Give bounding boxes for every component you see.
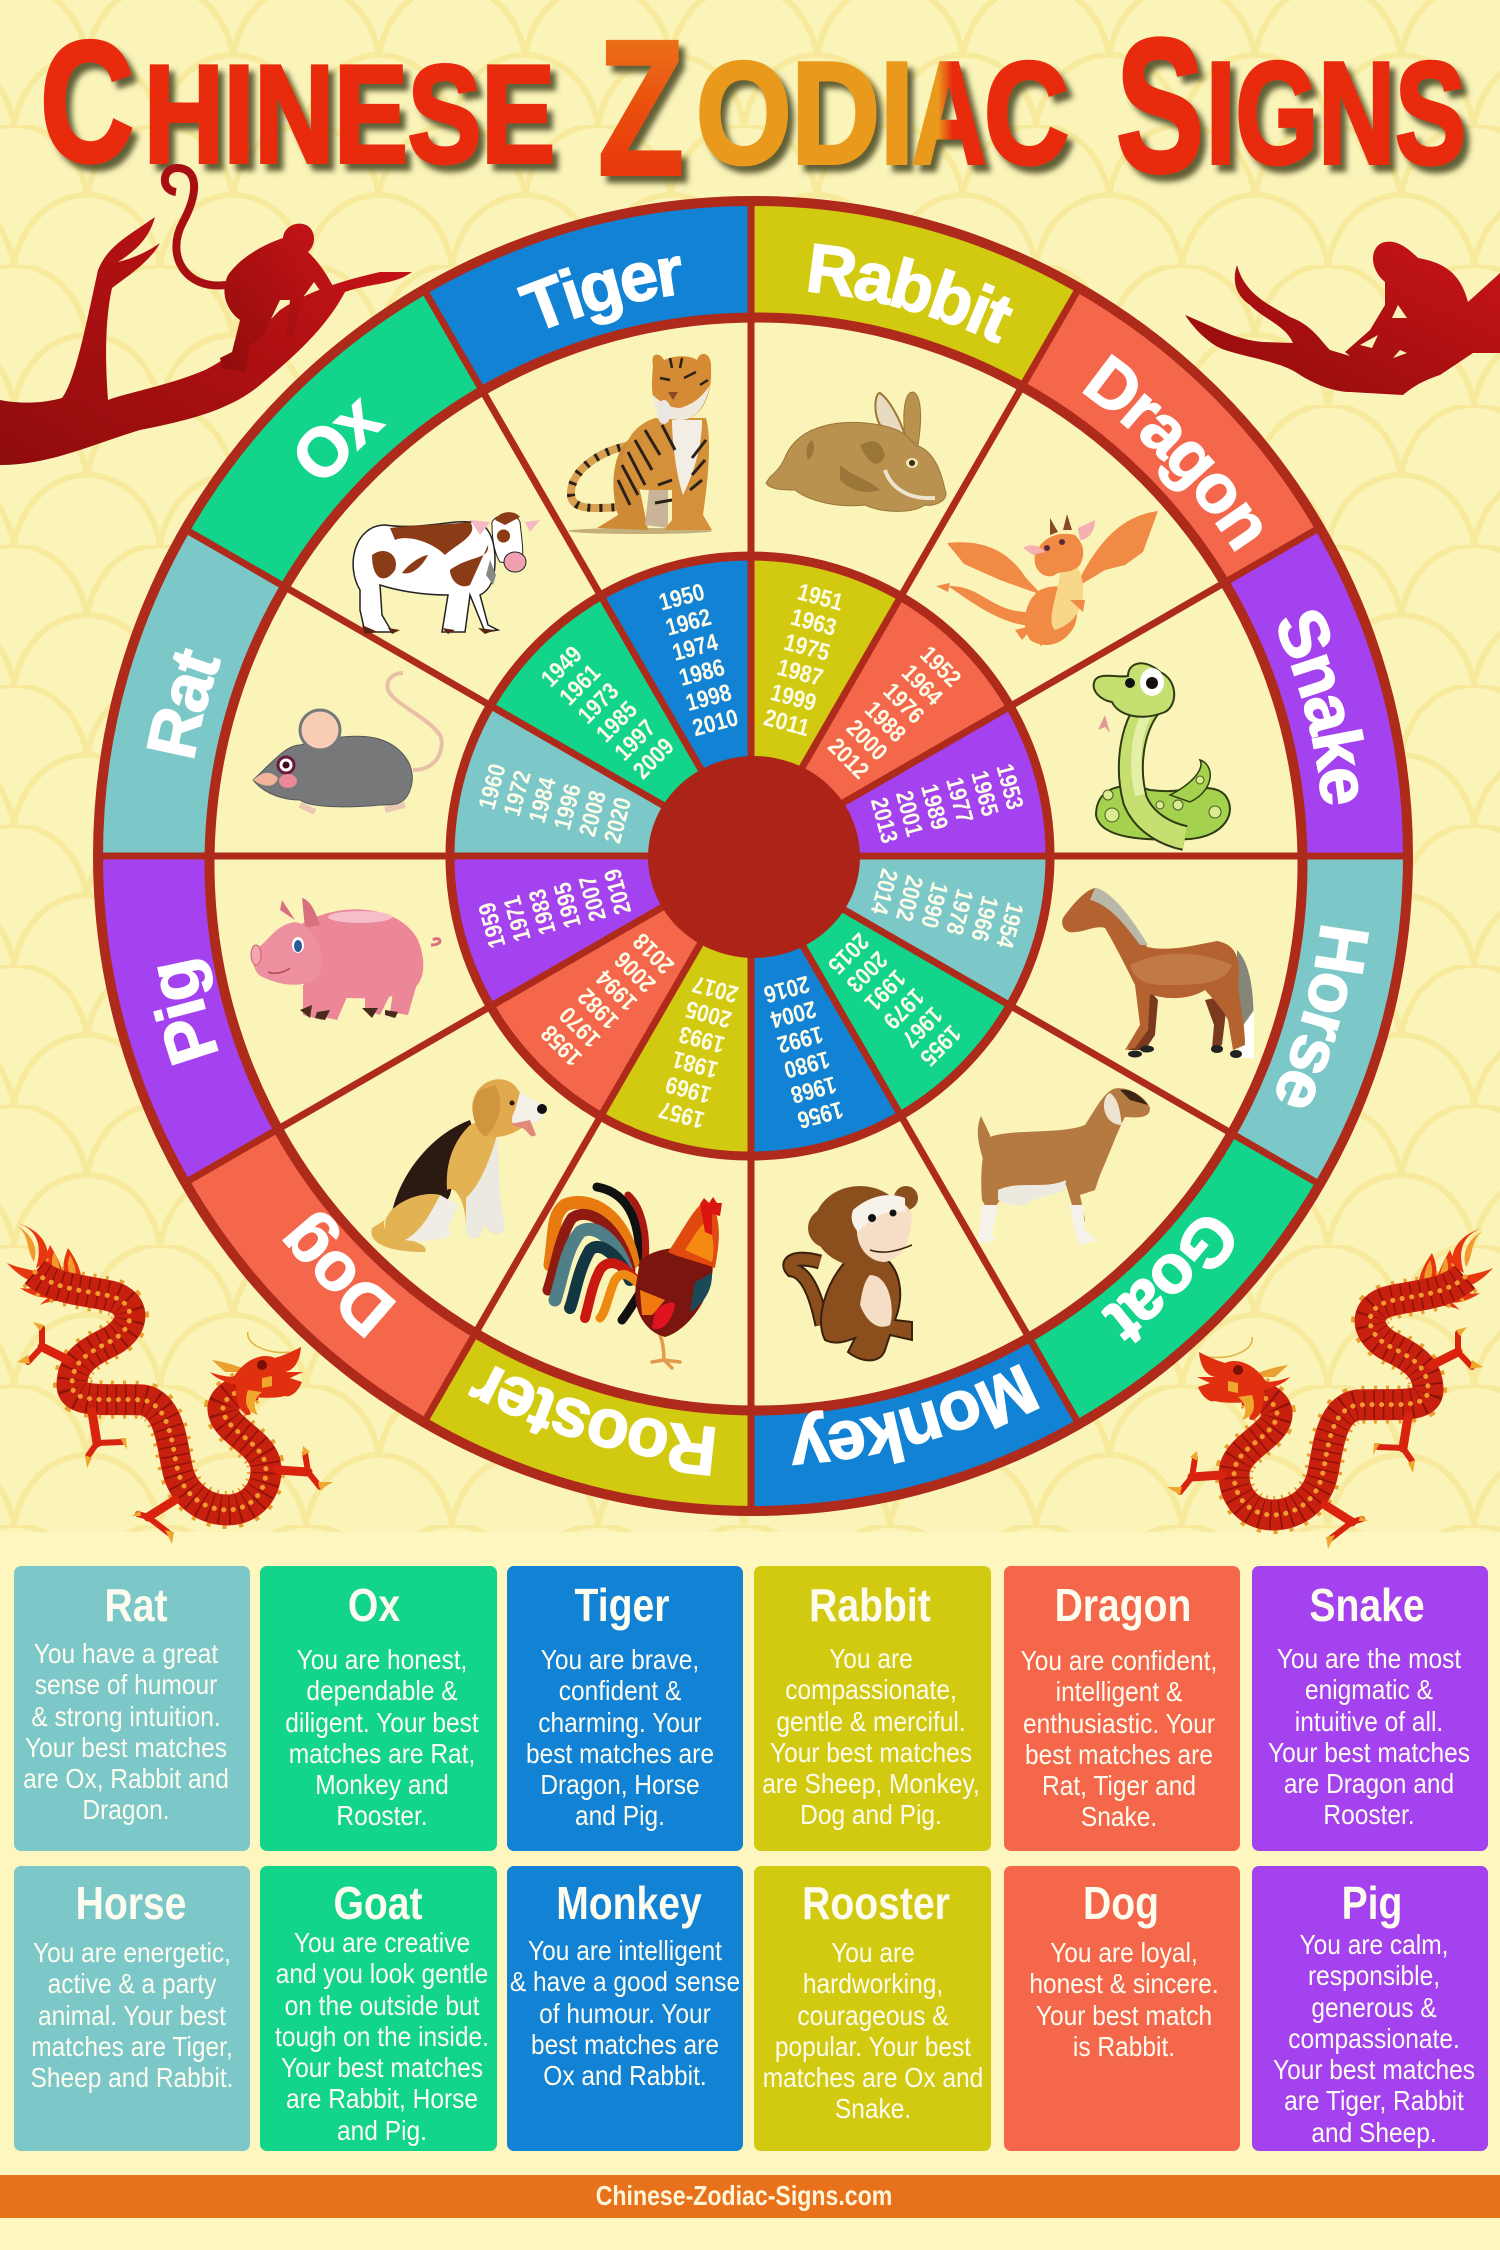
birth years on inner band: 1984 [524,774,562,826]
birth years on inner band: 2013 [865,795,903,846]
birth years on inner band: 1996 [549,781,587,833]
card: Pig: and Sheep. [1311,2117,1437,2148]
birth years on inner band: 1952 [914,641,966,693]
birth years on inner band: 2003 [841,946,892,997]
card: Horse: You are energetic, [33,1937,231,1968]
icon: baby dragon [936,511,1158,646]
icon: rat [253,673,442,812]
birth years on inner band: 1962 [663,604,714,642]
card: Dragon [1004,1566,1240,1851]
monkey silhouette on branch, top left [0,168,412,465]
card: Pig: are Tiger, Rabbit [1284,2085,1464,2116]
birth years on inner band: 1973 [573,678,624,729]
card: Pig: compassionate. [1288,2023,1460,2054]
card: Dog: Your best match [1036,2000,1212,2031]
birth years on inner band: 2018 [628,927,680,979]
birth years on inner band: 2007 [574,873,612,924]
card: Rooster: courageous & [797,2000,949,2031]
card: Dragon: best matches are [1025,1739,1213,1770]
card: Snake: Your best matches [1268,1737,1470,1768]
birth years on inner band: 2012 [822,733,874,785]
birth years on inner band: 1967 [896,1001,948,1053]
birth years on inner band: 1968 [788,1070,839,1108]
birth years on inner band: 1998 [683,679,734,717]
card: Snake: Rooster. [1323,1799,1415,1830]
card: Snake: intuitive of all. [1295,1706,1443,1737]
birth years on inner band: 1990 [915,879,953,931]
birth years on inner band: 2006 [610,946,661,997]
sign names on outer band: Ox [296,397,387,478]
birth years on inner band: 2014 [865,866,903,918]
birth years on inner band: 1965 [965,768,1003,819]
card: Goat: You are creative [294,1927,470,1958]
sign names on outer band: Pig [153,959,219,1066]
birth years on inner band: 1954 [990,900,1028,951]
birth years on inner band: 1956 [795,1095,846,1133]
dragon, bottom right [1167,1228,1493,1549]
card: Rooster: You are [831,1937,915,1968]
card: Rabbit: Dog and Pig. [800,1799,942,1830]
card: Goat: and Pig. [337,2115,427,2146]
birth years on inner band: 2019 [599,866,637,917]
card: Dog [1004,1866,1240,2151]
birth years on inner band: 2011 [761,704,812,742]
card: Dog: You are loyal, [1050,1937,1198,1968]
sign names on outer band: Dog [282,1212,396,1338]
card: Goat: are Rabbit, Horse [286,2083,478,2114]
birth years on inner band: 2020 [599,795,637,846]
card: Monkey: Ox and Rabbit. [543,2060,707,2091]
title: HINESE [144,37,555,192]
card: Rat: You have a great [34,1638,218,1669]
card: Pig: You are calm, [1300,1929,1448,1960]
sign names on outer band [146,243,1370,1476]
birth years on inner band: 1983 [524,886,562,937]
card: Monkey: best matches are [531,2029,719,2060]
birth years on inner band: 1981 [670,1045,721,1083]
card: Tiger: charming. Your [538,1707,702,1738]
card: Rabbit: You are [829,1643,913,1674]
card: Ox: Rooster. [336,1800,428,1831]
birth years on inner band: 1999 [768,679,819,717]
sign names on outer band: Goat [1101,1217,1234,1344]
card: Pig: generous & [1311,1992,1437,2023]
birth years on inner band: 1966 [965,893,1003,944]
title: A [912,32,986,194]
card: Tiger: You are brave, [541,1644,699,1675]
card: Snake: enigmatic & [1305,1674,1433,1705]
sign names on outer band: Horse [1276,925,1370,1108]
card: Pig: Pig [1342,1877,1402,1929]
card: Dog: Dog [1083,1877,1159,1929]
card: Dragon: You are confident, [1021,1645,1217,1676]
card: Snake: Snake [1309,1579,1425,1631]
centre hub [648,756,860,958]
card: Tiger: confident & [559,1675,681,1706]
card: Rooster: Rooster [802,1877,950,1929]
card: Pig [1252,1866,1488,2151]
card: Ox: matches are Rat, [289,1738,475,1769]
birth years on inner band: 1986 [676,654,728,692]
card: Rooster: Snake. [835,2093,911,2124]
title: S [1116,0,1204,212]
card: Dragon: Rat, Tiger and [1042,1770,1196,1801]
footer bar [0,2175,1500,2218]
birth years on inner band: 1992 [774,1020,826,1058]
birth years on inner band: 1950 [656,579,707,617]
card: Horse: Sheep and Rabbit. [31,2062,233,2093]
birth years on inner band: 1976 [878,678,929,729]
card: Goat [260,1866,497,2151]
card: Goat: on the outside but [285,1990,479,2021]
birth years on inner band: 1958 [536,1019,588,1071]
birth years on inner band: 1960 [474,761,512,812]
card: Dragon: Dragon [1055,1579,1191,1631]
birth years on inner band: 1964 [896,659,948,711]
birth years on inner band: 1961 [554,659,606,711]
card: Snake: You are the most [1277,1643,1461,1674]
icon: horse [1062,888,1254,1058]
birth years on inner band: 1970 [554,1001,606,1053]
birth years on inner band: 1982 [573,983,624,1034]
birth years on inner band: 1980 [781,1045,832,1083]
card: Rat: Dragon. [82,1794,170,1825]
card: Rat: sense of humour [35,1669,217,1700]
birth years on inner band: 1993 [676,1020,728,1058]
card: Dragon: intelligent & [1056,1676,1182,1707]
birth years on inner band: 1977 [940,775,978,826]
birth years on inner band: 2016 [761,970,812,1008]
icon: pig [251,898,440,1020]
card: Rabbit: Rabbit [809,1579,931,1631]
title: C [984,32,1069,194]
birth years on inner band: 1953 [990,761,1028,812]
icon: monkey [790,1186,918,1360]
sign names on outer band: Rabbit [808,243,1014,344]
card: Dog: honest & sincere. [1029,1968,1219,1999]
card: Rabbit: Your best matches [770,1737,972,1768]
icon: tiger [568,354,712,534]
card: Tiger: Tiger [575,1579,669,1631]
birth years on inner band: 2017 [690,970,741,1008]
birth years on inner band: 1995 [549,879,587,931]
card: Goat: Your best matches [281,2052,483,2083]
card: Rooster [754,1866,991,2151]
card: Ox: diligent. Your best [285,1707,479,1738]
title: ODI [696,32,914,194]
birth years on inner band: 2001 [890,788,928,839]
sign names on outer band: Tiger [516,256,682,328]
birth years on inner band: 1979 [878,983,929,1034]
birth years on inner band: 2002 [890,873,928,924]
card: Goat: and you look gentle [276,1958,488,1989]
birth years on inner band: 1969 [663,1070,714,1108]
card: Horse: active & a party [48,1968,216,1999]
card: Tiger: Dragon, Horse [540,1769,700,1800]
card: Dog: is Rabbit. [1073,2031,1175,2062]
card: Rooster: matches are Ox and [763,2062,983,2093]
birth years on inner band: 1975 [781,629,832,667]
icon: ox [353,512,540,634]
zodiac wheel [93,196,1413,1516]
sign names on outer band: Dragon [1082,354,1262,552]
birth years on inner band: 1955 [914,1019,966,1071]
birth years on inner band: 1991 [859,964,911,1016]
birth years on inner band: 1963 [788,604,839,642]
birth years on inner band: 2010 [690,704,741,742]
card: Horse [14,1866,250,2151]
sign names on outer band: Rooster [468,1366,716,1476]
birth years on inner band: 2009 [628,733,680,785]
card: Rat: Rat [104,1579,168,1631]
birth years on inner band: 1951 [795,579,846,617]
card: Tiger: and Pig. [575,1800,665,1831]
card: Monkey: of humour. Your [539,1998,711,2029]
icon: snake [1094,663,1230,840]
card: Rat: Your best matches [25,1732,227,1763]
birth years on inner band: 2005 [683,995,734,1033]
card: Monkey: Monkey [556,1877,702,1929]
birth years on inner band: 1959 [474,900,512,951]
monkey silhouette, top right [1185,242,1500,395]
birth years on inner band: 1974 [670,629,721,667]
background scale pattern [0,0,1500,1532]
card: Ox: You are honest, [297,1644,467,1675]
title [40,0,1466,215]
icon: rabbit [766,392,946,511]
card: Pig: Your best matches [1273,2054,1475,2085]
card: Horse: Horse [76,1877,186,1929]
card: Monkey: You are intelligent [528,1935,722,1966]
birth years on inner band: 1988 [859,696,911,748]
card: Tiger: best matches are [526,1738,714,1769]
card: Rabbit [754,1566,991,1851]
card: Goat: tough on the inside. [275,2021,489,2052]
card: Horse: matches are Tiger, [31,2031,233,2062]
card: Rooster: popular. Your best [775,2031,971,2062]
birth years on inner band: 2000 [841,715,892,766]
card: Rooster: hardworking, [803,1968,943,1999]
birth years on inner band: 1949 [536,641,588,693]
card: Pig: responsible, [1308,1960,1440,1991]
birth years on inner band: 1971 [499,893,537,944]
card: Ox: Ox [348,1579,400,1631]
card: Rat: & strong intuition. [31,1701,221,1732]
card: Snake: are Dragon and [1284,1768,1454,1799]
icon: goat [978,1088,1150,1246]
card: Snake [1252,1566,1488,1851]
card: Monkey [507,1866,743,2151]
outer band: sign segments [0,47,1500,1665]
card: Goat: Goat [333,1877,423,1929]
card: Horse: animal. Your best [38,2000,226,2031]
birth years on inner band: 1972 [499,768,537,819]
sign names on outer band: Snake [1278,610,1364,805]
card: Dragon: Snake. [1081,1801,1157,1832]
icon: rooster [548,1187,722,1368]
card: Rabbit: are Sheep, Monkey, [762,1768,980,1799]
birth years on inner band: 2004 [767,995,819,1033]
card: Monkey: & have a good sense [510,1966,740,1997]
card: Ox [260,1566,497,1851]
birth years on inner band: 1997 [610,715,661,766]
card: Tiger [507,1566,743,1851]
card: Rabbit: gentle & merciful. [776,1706,966,1737]
birth years on inner band: 2008 [574,788,612,839]
card: Dragon: enthusiastic. Your [1023,1708,1215,1739]
birth years on inner band: 1985 [591,696,643,748]
birth years on inner band: 1987 [774,654,826,692]
birth years on inner band: 1957 [656,1095,707,1133]
birth years on inner band [474,578,1028,1134]
dragon, bottom left [7,1223,333,1544]
birth years on inner band: 1978 [940,886,978,937]
title: Z [598,0,684,215]
footer bar: Chinese-Zodiac-Signs.com [596,2180,892,2211]
title: C [40,6,134,198]
sign names on outer band: Monkey [792,1364,1040,1466]
card: Ox: Monkey and [315,1769,449,1800]
birth years on inner band: 1994 [591,964,643,1016]
card: Ox: dependable & [306,1675,458,1706]
icon: dog [371,1079,547,1252]
birth years on inner band: 2015 [822,927,874,979]
card: Rabbit: compassionate, [785,1674,957,1705]
inner band: year segments [480,586,1020,1126]
card: Rat: are Ox, Rabbit and [23,1763,229,1794]
card: Rat [14,1566,250,1851]
sign names on outer band: Rat [146,648,221,758]
birth years on inner band: 1989 [915,781,953,833]
